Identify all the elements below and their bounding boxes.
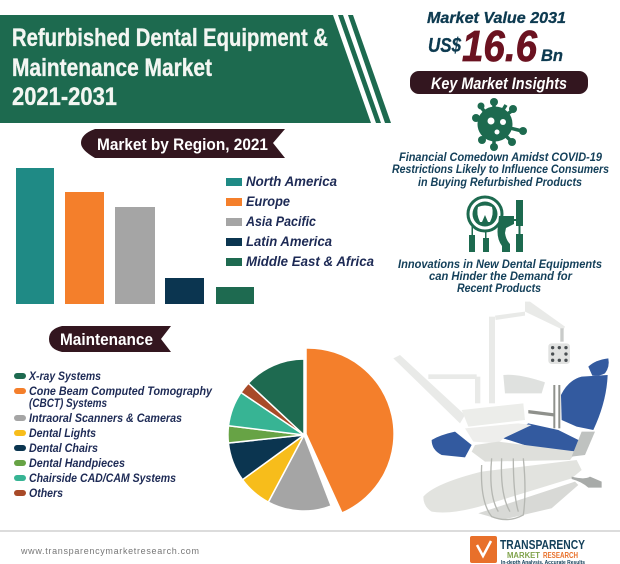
seat white panel — [465, 423, 532, 443]
market value — [427, 10, 566, 71]
seat — [503, 423, 582, 452]
legend: maintenance — [14, 371, 213, 500]
legend: maintenance: Cone Beam Computed Tomography — [29, 386, 213, 398]
legend: regions: North America — [246, 173, 337, 189]
legend: regions: Asia Pacific — [245, 213, 316, 229]
title text: 2021-2031 — [12, 83, 117, 111]
market value: Bn — [541, 46, 563, 65]
legend: maintenance: (CBCT) Systems — [29, 398, 107, 410]
footer rule — [0, 530, 620, 532]
legend: maintenance: Intraoral Scanners & Cameras — [29, 413, 182, 425]
insight text 2: can Hinder the Demand for — [429, 269, 573, 283]
dental light — [548, 328, 570, 364]
insight text 1 — [392, 150, 609, 189]
title text — [12, 24, 328, 111]
legend: maintenance: Dental Handpieces — [29, 458, 125, 470]
leg rest — [432, 432, 472, 457]
insight text 2: Innovations in New Dental Equipments — [398, 257, 602, 271]
pie chart: maintenance — [228, 348, 394, 513]
insight text 2: Recent Products — [457, 281, 541, 295]
insight text 1: in Buying Refurbished Products — [418, 175, 582, 189]
chair base shadow — [478, 482, 578, 520]
legend: regions — [226, 173, 374, 269]
chair support — [472, 442, 577, 462]
insight text 1: Financial Comedown Amidst COVID-19 — [399, 150, 602, 164]
title banner — [0, 15, 391, 123]
title text: Maintenance Market — [12, 54, 213, 82]
headrest — [588, 358, 609, 376]
heading: maintenance: Maintenance — [60, 331, 153, 349]
market value: Market Value 2031 — [427, 10, 566, 27]
hoses — [481, 458, 525, 520]
legend: regions: Europe — [246, 193, 290, 209]
foot pedal — [572, 477, 602, 488]
legend: maintenance: Others — [29, 488, 63, 500]
icon: virus — [472, 98, 527, 151]
logo: transparency market research: RESEARCH — [543, 551, 578, 560]
chair base — [423, 460, 582, 512]
spittoon — [503, 375, 545, 393]
legend: maintenance: Chairside CAD/CAM Systems — [29, 473, 176, 485]
console — [462, 403, 525, 427]
insight text 2 — [398, 257, 602, 295]
market value: 16.6 — [462, 22, 537, 71]
title text: Refurbished Dental Equipment & — [12, 24, 328, 52]
legend: maintenance: X-ray Systems — [28, 371, 101, 383]
legend: maintenance: Dental Chairs — [29, 443, 98, 455]
website: www.transparencymarketresearch.com — [20, 546, 199, 556]
heading: market by region: Market by Region, 2021 — [97, 135, 268, 154]
legend: regions: Latin America — [246, 233, 332, 249]
legend: maintenance: Dental Lights — [29, 428, 96, 440]
heading: maintenance — [49, 326, 171, 352]
logo: transparency market research: TRANSPARENCY — [500, 537, 585, 552]
market value: US$ — [428, 35, 462, 57]
icon: dental tools — [468, 197, 523, 252]
illustration: dental chair — [393, 302, 609, 520]
legend: regions: Middle East & Africa — [246, 253, 374, 269]
instruments — [528, 385, 560, 428]
logo: transparency market research: MARKET — [507, 551, 540, 560]
chair back — [561, 375, 608, 430]
heading: market by region — [81, 129, 285, 158]
logo mark — [470, 536, 497, 563]
bar chart: market by region — [16, 168, 254, 304]
logo: transparency market research — [470, 536, 585, 564]
heading: key market insights: Key Market Insights — [431, 74, 567, 93]
overhead arm and pole — [393, 302, 565, 423]
